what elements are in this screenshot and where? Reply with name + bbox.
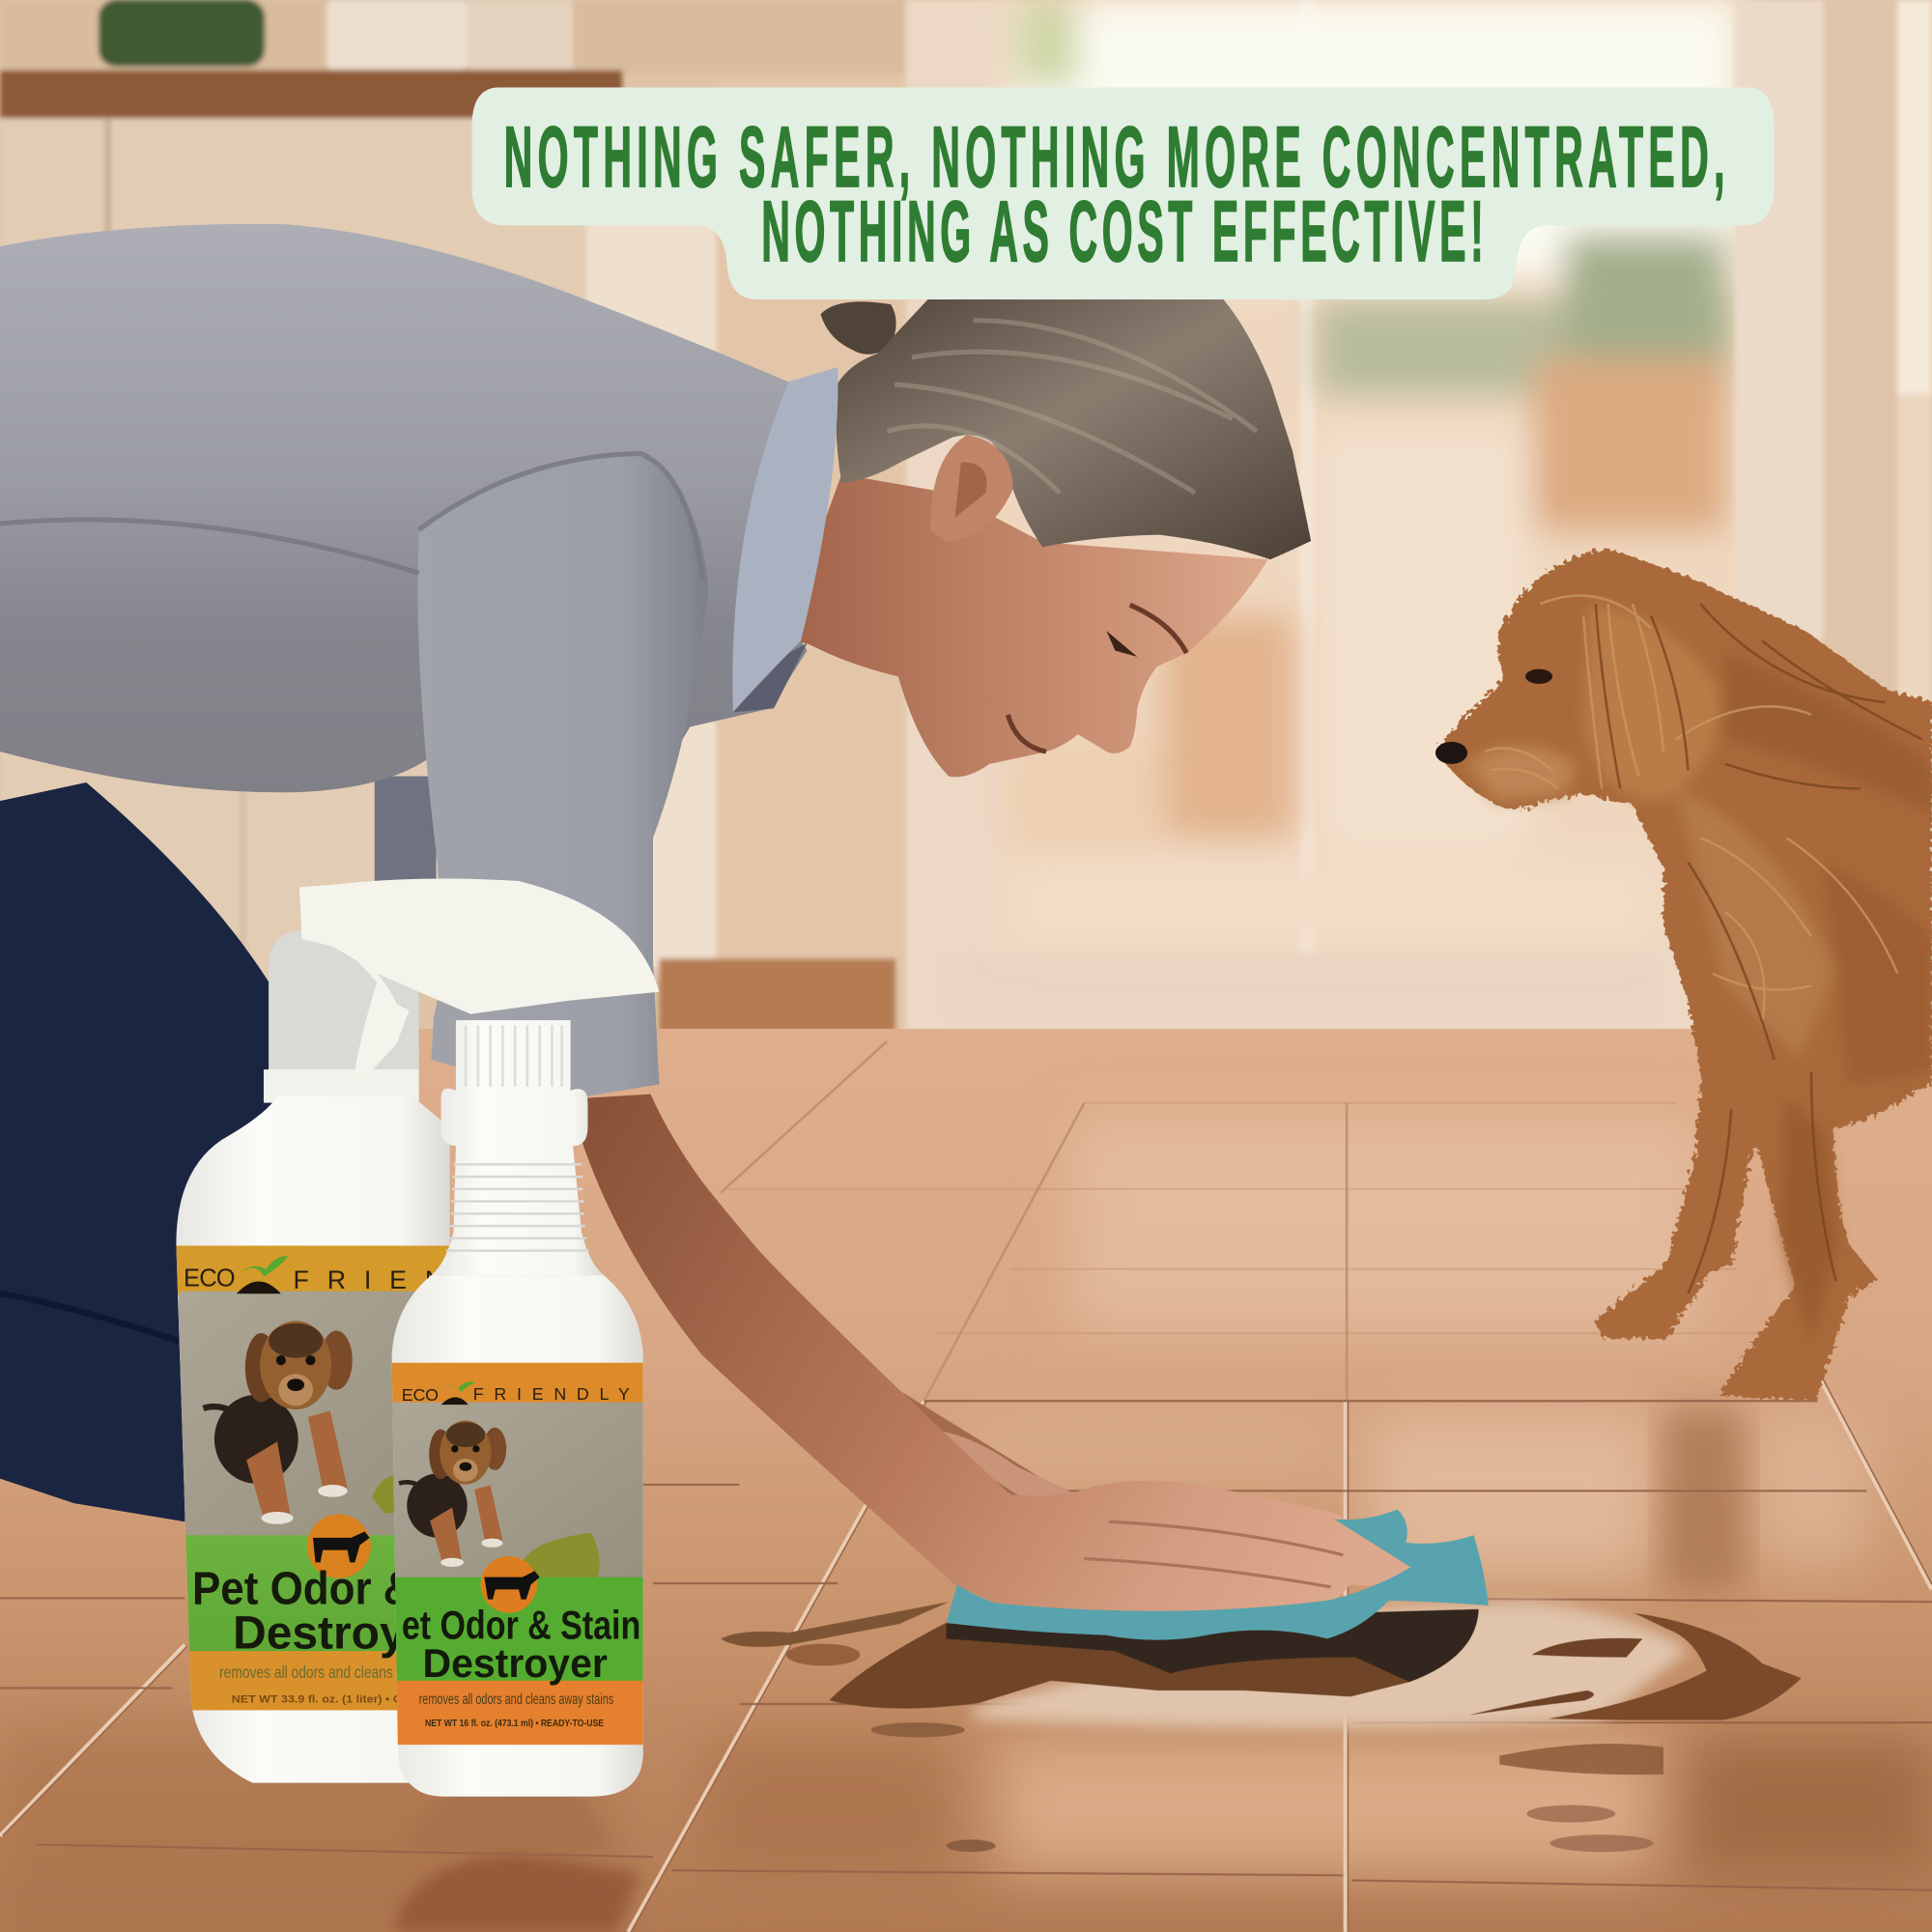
ear inner	[955, 462, 986, 518]
large label text: NET WT 33.9 fl. oz. (1 liter) • Con	[232, 1694, 416, 1706]
far arm gray	[375, 777, 437, 887]
background: kitchen room	[0, 0, 1932, 1047]
brown spill right	[1548, 1613, 1802, 1720]
small bottle	[392, 1020, 644, 1797]
small bottle neck	[431, 1020, 604, 1275]
face features	[1008, 605, 1186, 752]
sleeve	[417, 453, 708, 1099]
cloth	[947, 1509, 1489, 1640]
collar	[732, 367, 838, 712]
grout lines	[0, 1041, 1932, 1932]
hair	[836, 299, 1311, 559]
small bottle ribs	[446, 1164, 589, 1251]
floor reflections	[0, 1122, 1932, 1932]
large label text: removes all odors and cleans a	[219, 1662, 404, 1682]
headline text	[504, 108, 1725, 279]
large label photo	[178, 1291, 415, 1538]
small label text: Destroyer	[423, 1640, 608, 1686]
large label text: Pet Odor &	[192, 1563, 414, 1615]
hair bun	[820, 301, 896, 355]
cloth reflection	[947, 1609, 1479, 1682]
small label text: NET WT 16 fl. oz. (473.1 ml) • READY-TO-USE	[425, 1719, 604, 1729]
large bottle cap	[269, 930, 419, 1072]
product bottles	[173, 879, 659, 1797]
window frame	[906, 0, 1744, 1033]
dog fur strands	[1485, 595, 1922, 1293]
small label puppy	[399, 1420, 506, 1567]
eye	[1106, 631, 1137, 657]
large bottle body	[176, 1096, 450, 1783]
small label photo	[392, 1403, 644, 1580]
small bottle body	[392, 1275, 643, 1797]
cap ribs	[466, 1025, 562, 1087]
brown spill left	[829, 1610, 1479, 1709]
door frame right	[1735, 0, 1932, 702]
near arm and hand	[569, 1094, 1410, 1611]
window view outside	[1010, 0, 1737, 944]
headline bubble	[472, 88, 1775, 299]
splash drips	[721, 1602, 949, 1647]
spray trigger head	[299, 879, 659, 1093]
dog eye	[1525, 669, 1552, 684]
large label text: ECO	[184, 1265, 236, 1293]
dog fur shading	[1466, 604, 1932, 1343]
pants	[0, 782, 277, 1521]
large label text: FRIEN	[294, 1265, 443, 1294]
glossy sheen	[974, 1602, 1688, 1728]
small label text: FRIENDLY	[473, 1384, 630, 1404]
dog nose	[1435, 742, 1467, 764]
small label dog icon	[484, 1571, 540, 1600]
small label text: et Odor & Stain	[402, 1602, 640, 1647]
large label text	[184, 1256, 443, 1706]
far hand	[933, 1430, 1074, 1498]
headline text: NOTHING SAFER, NOTHING MORE CONCENTRATED,	[504, 108, 1725, 206]
small label text: ECO	[402, 1385, 439, 1405]
small label text: removes all odors and cleans away stains	[419, 1691, 613, 1708]
dog body and legs	[1435, 551, 1932, 1401]
fingers	[1084, 1521, 1343, 1587]
wall and cabinets	[0, 0, 906, 1035]
far forearm	[640, 1109, 1072, 1521]
ear	[930, 435, 1012, 542]
floor tiles	[0, 1029, 1932, 1932]
large label text: Destroy	[233, 1607, 406, 1660]
dog	[1435, 551, 1932, 1401]
hair strands	[887, 321, 1257, 493]
shirt body	[0, 224, 838, 792]
face and neck	[782, 474, 1267, 777]
spill puddle	[721, 1602, 1802, 1852]
shirt seams	[0, 453, 702, 579]
small bottle label	[392, 1363, 644, 1745]
small label text	[402, 1382, 640, 1729]
large label puppy	[203, 1321, 353, 1524]
large label dog icon	[313, 1531, 370, 1562]
large bottle	[173, 930, 456, 1783]
collar dark inner	[733, 643, 807, 712]
headline text: NOTHING AS COST EFFECTIVE!	[761, 183, 1484, 279]
woman	[0, 224, 1489, 1640]
large bottle label	[173, 1246, 456, 1710]
bubble shape	[472, 88, 1775, 299]
